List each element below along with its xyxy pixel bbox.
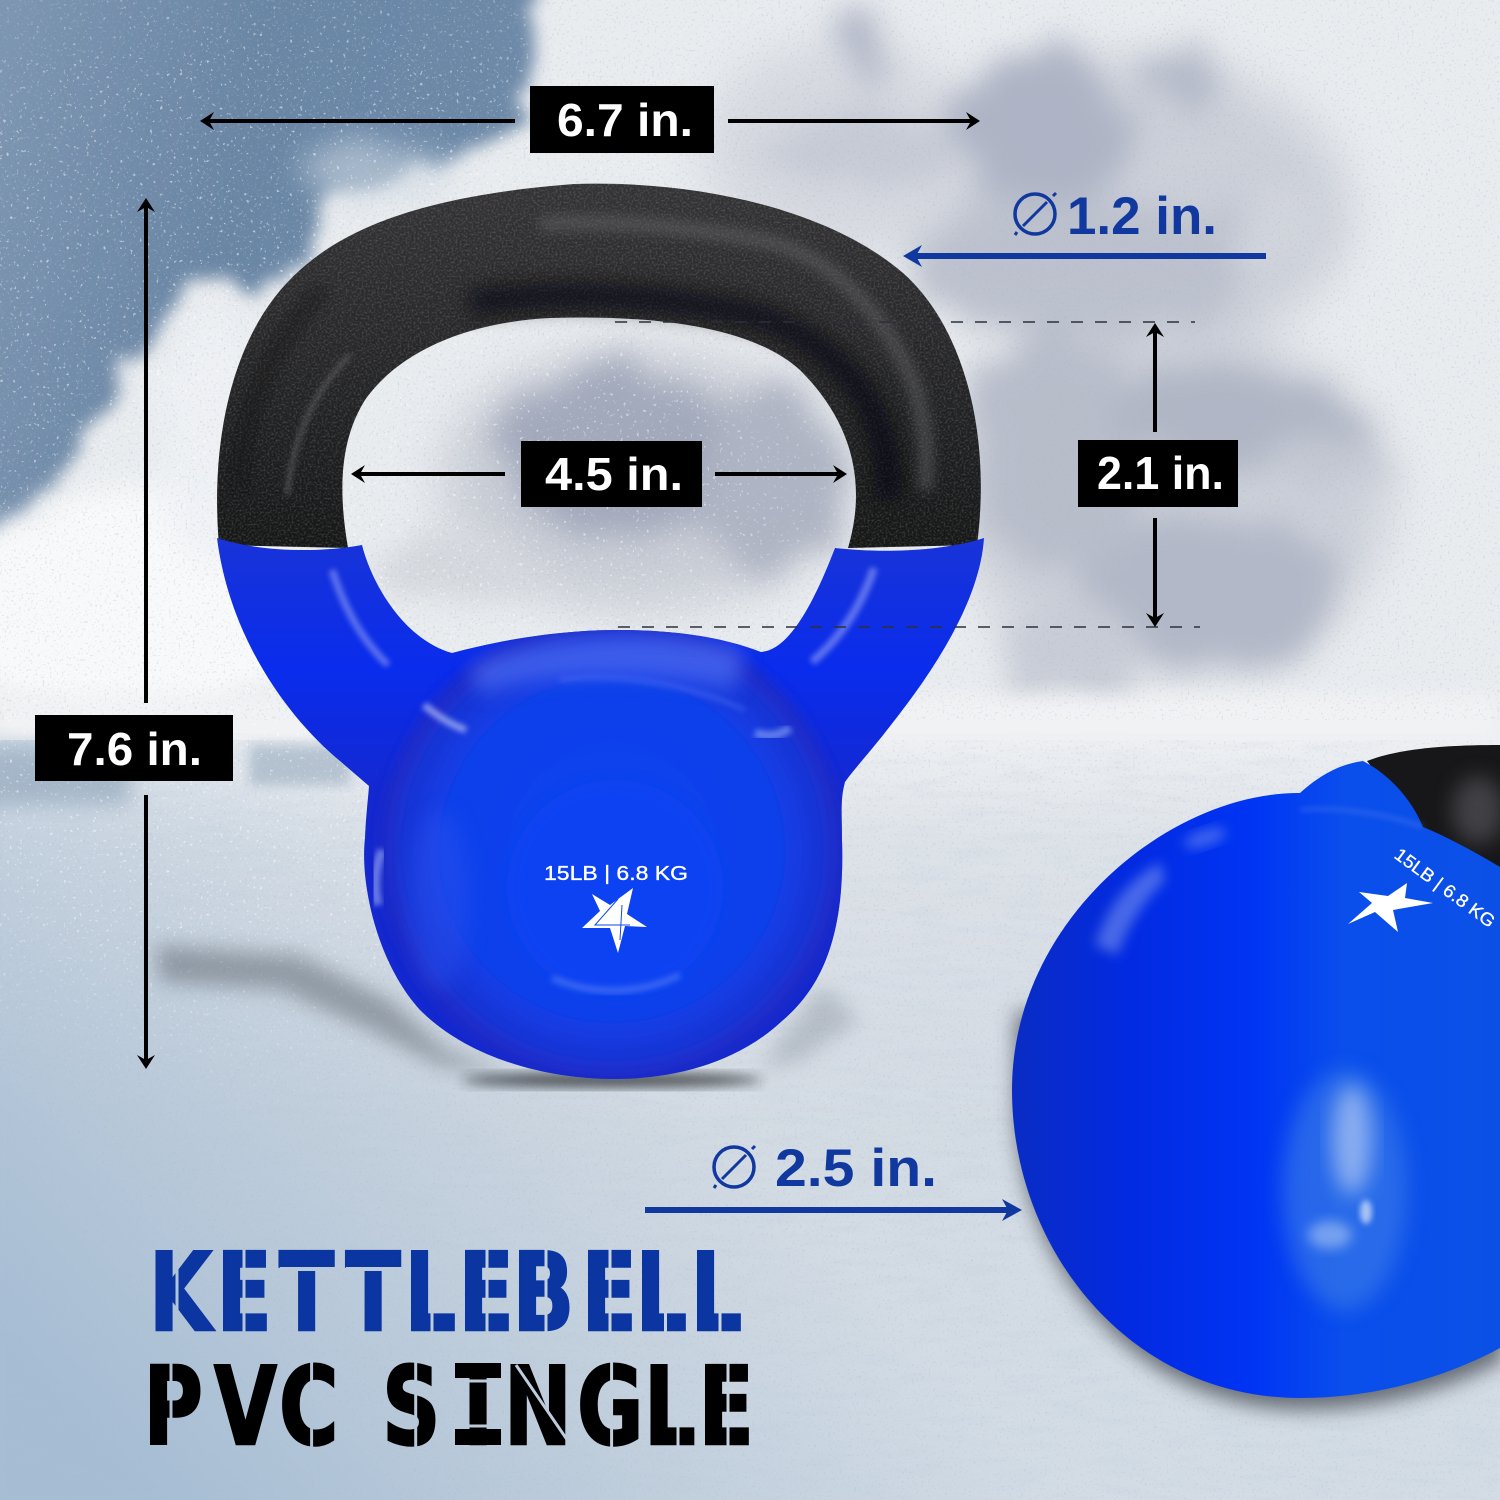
icon: star logo on ball xyxy=(1348,883,1433,932)
title: KETTLEBELL: KETTLEBELL xyxy=(149,1229,742,1356)
dimension: base diameter 2.5 in: 2.5 in. xyxy=(775,1139,937,1198)
ball gloss xyxy=(1095,862,1165,955)
dimension: handle inner height 2.1 in: 2.1 in. xyxy=(1097,447,1224,499)
ball xyxy=(1012,761,1500,1398)
weight label on body: 15LB | 6.8 KG xyxy=(544,863,688,885)
handle surface grain xyxy=(217,184,981,548)
shoulder highlight xyxy=(470,636,745,695)
icon: star logo xyxy=(582,888,647,953)
handle, rear xyxy=(1367,745,1500,880)
subtitle: PVC SINGLE xyxy=(150,1362,749,1447)
dimension: handle diameter 1.2 in xyxy=(903,187,1266,267)
weight label on ball: 15LB | 6.8 KG xyxy=(1391,844,1499,932)
dimension: handle inner width 4.5 in: 4.5 in. xyxy=(545,448,683,500)
dimension: overall width 6.7 in: 6.7 in. xyxy=(557,94,693,146)
handle highlights xyxy=(540,223,926,490)
nub shade line xyxy=(1300,809,1423,827)
dimension: overall width 6.7 in xyxy=(209,86,971,153)
kettlebell: main front view xyxy=(200,184,1000,1090)
blue silhouette: collar, arms and body xyxy=(200,530,1000,1090)
kettlebell: second lying view xyxy=(1012,745,1500,1398)
body inner ring highlight xyxy=(507,780,723,996)
gloss on arms xyxy=(332,570,388,665)
dimension: overall height 7.6 in: 7.6 in. xyxy=(67,723,202,775)
body xyxy=(380,618,844,1082)
subtitle: PVC SINGLE: PVC SINGLE xyxy=(143,1343,754,1470)
dimension: handle diameter 1.2 in: 1.2 in. xyxy=(1067,187,1217,246)
dimension: handle inner height 2.1 in xyxy=(615,322,1238,627)
handle: black iron xyxy=(217,184,981,548)
dimension: overall height 7.6 in xyxy=(35,207,233,1060)
dimension: base diameter 2.5 in xyxy=(645,1139,1022,1221)
dimension: handle inner width 4.5 in xyxy=(360,441,838,507)
